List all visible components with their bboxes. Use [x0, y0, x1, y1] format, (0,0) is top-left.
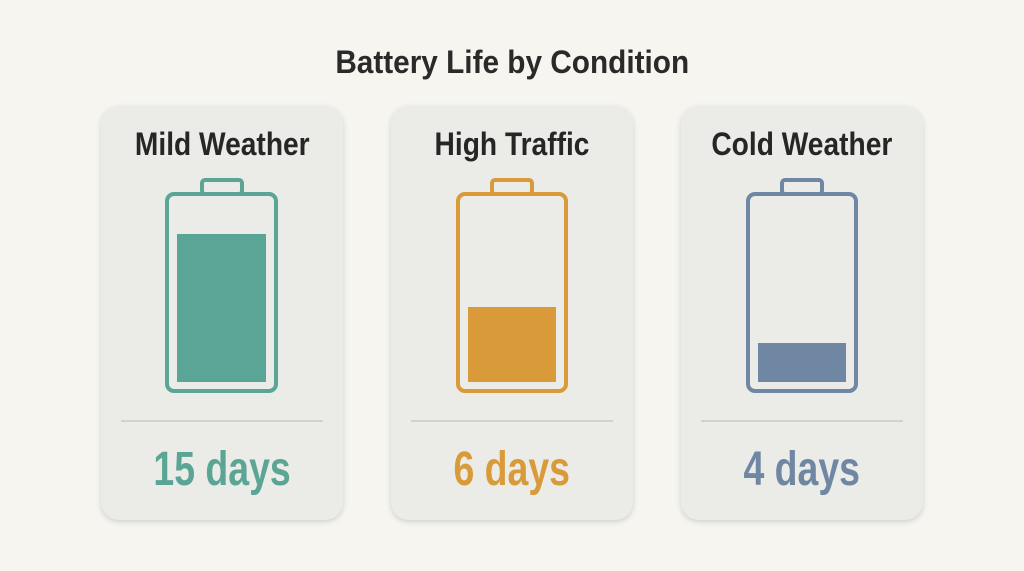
panel: cold weather	[681, 106, 923, 520]
panel: high traffic	[391, 106, 633, 520]
value: 6 days	[454, 443, 570, 496]
icon: battery low	[746, 178, 858, 393]
icon: battery high	[165, 178, 278, 393]
card heading: High Traffic	[435, 126, 589, 162]
panel: mild weather	[101, 106, 343, 520]
card heading: Cold Weather	[712, 126, 892, 162]
value: 4 days	[744, 443, 860, 496]
icon: battery medium	[456, 178, 568, 393]
title: Battery Life by Condition	[335, 44, 689, 80]
value: 15 days	[153, 443, 291, 496]
card heading: Mild Weather	[135, 126, 309, 162]
